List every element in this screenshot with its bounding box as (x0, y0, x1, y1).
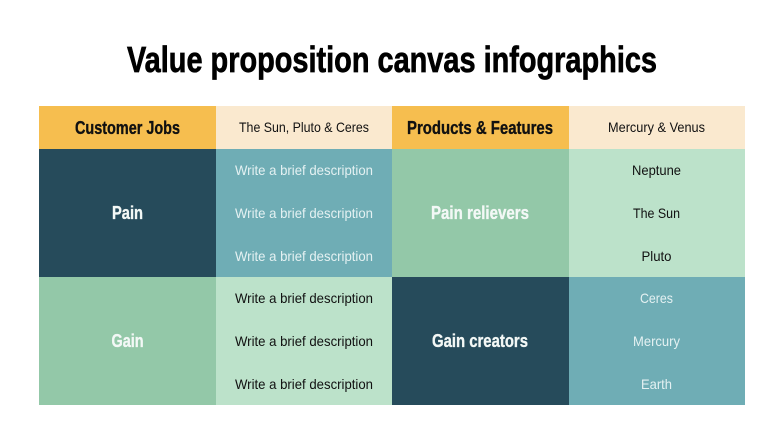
panel: Gain creators list (569, 277, 745, 405)
panel: Gain creators list: Ceres (640, 290, 673, 306)
header: Mercury & Venus: Mercury & Venus (608, 119, 705, 135)
panel: Gain creators list: Mercury (633, 333, 680, 349)
panel: Gain descriptions: Write a brief description (235, 333, 373, 349)
panel: Pain descriptions: Write a brief description (235, 248, 373, 264)
panel: Pain descriptions (216, 149, 392, 277)
panel: Pain descriptions: Write a brief description (235, 205, 373, 221)
panel: Pain: Pain (112, 202, 143, 223)
header: Products & Features: Products & Features (407, 117, 553, 138)
panel: Gain descriptions: Write a brief description (235, 290, 373, 306)
panel: Gain creators: Gain creators (432, 330, 528, 351)
panel: Pain descriptions: Write a brief description (235, 162, 373, 178)
panel: Gain creators (392, 277, 569, 405)
panel: Pain relievers list: Neptune (632, 162, 681, 178)
panel: Gain descriptions: Write a brief description (235, 376, 373, 392)
header: Customer Jobs (39, 106, 216, 149)
panel: Pain relievers list: The Sun (633, 205, 680, 221)
header: Mercury & Venus (569, 106, 745, 149)
panel: Pain relievers: Pain relievers (431, 202, 529, 223)
panel: Pain relievers list (569, 149, 745, 277)
header: The Sun, Pluto & Ceres (216, 106, 392, 149)
title: Value proposition canvas infographics (127, 39, 657, 80)
panel: Gain creators list: Earth (641, 376, 672, 392)
panel: Pain relievers (392, 149, 569, 277)
canvas table (39, 106, 745, 405)
panel: Gain descriptions (216, 277, 392, 405)
panel: Pain relievers list: Pluto (642, 248, 672, 264)
panel: Gain (39, 277, 216, 405)
header: The Sun, Pluto & Ceres: The Sun, Pluto & Ceres (239, 119, 369, 135)
panel: Gain: Gain (112, 330, 144, 351)
panel: Pain (39, 149, 216, 277)
header: Products & Features (392, 106, 569, 149)
header: Customer Jobs: Customer Jobs (75, 117, 180, 138)
